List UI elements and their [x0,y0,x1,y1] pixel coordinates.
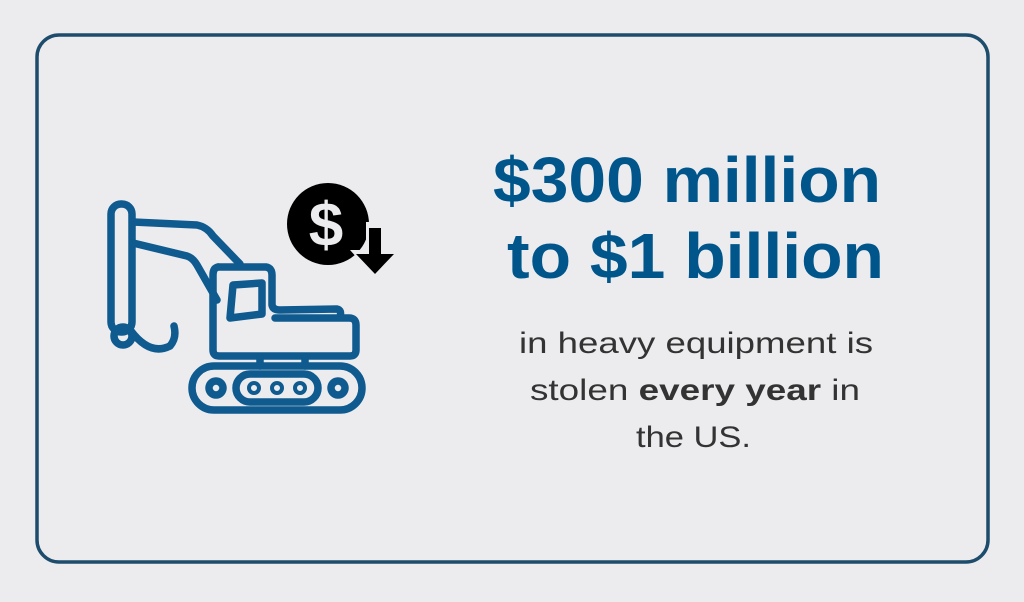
text block: description [519,327,873,454]
heading: $300 million [493,144,881,216]
heading [493,144,884,292]
heading: to $1 billion [507,220,884,292]
text block: description: the US. [636,421,751,454]
text block: description: stolen every year in [530,374,860,407]
text block: description: in heavy equipment is [519,327,873,360]
icon: excavator [111,204,362,410]
icon: dollar with down arrow [287,183,400,278]
icon: dollar with down arrow: $ [309,191,343,260]
